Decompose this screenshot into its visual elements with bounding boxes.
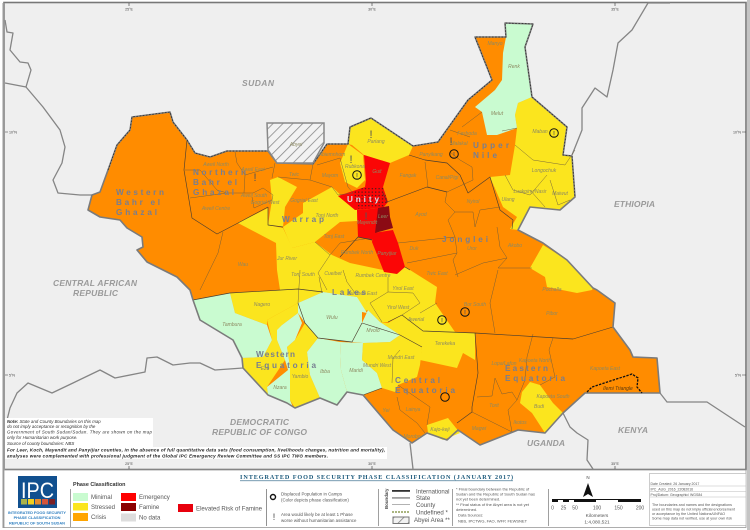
boundary footnotes: Sudan and the Republic of South Sudan has	[456, 492, 535, 496]
map information box: or acceptance by the United Nations/UNFAO	[652, 512, 725, 516]
scale bar: 100	[593, 506, 601, 512]
exclamation markers: worse without assistance: !	[449, 136, 453, 148]
country labels: REPUBLIC	[73, 288, 119, 298]
county labels: Kapoeta East	[590, 366, 621, 372]
county labels: Rumbek Centre	[355, 273, 391, 279]
IPC logo: IPC	[21, 478, 54, 503]
country labels: CENTRAL AFRICAN	[53, 278, 138, 288]
county labels: Leer	[378, 214, 388, 220]
boundary legend: State	[416, 495, 431, 502]
county labels: Fashoda	[457, 131, 477, 137]
note box: only for Humanitarian work purpose.	[7, 435, 78, 440]
legend title: INTEGRATED FOOD SECURITY PHASE CLASSIFICATION (JANUARY 2017)	[240, 474, 513, 481]
boundary legend: Boundary	[384, 488, 389, 509]
scale bar: 0	[551, 506, 554, 512]
north arrow: N	[586, 475, 590, 480]
county labels: Mundri West	[363, 363, 392, 369]
county labels: Maban	[532, 129, 548, 135]
county labels: Yirol East	[392, 286, 414, 292]
graticule labels: 30°E	[368, 462, 377, 466]
phase classification legend: No data	[139, 514, 161, 522]
famine county: Leer	[375, 206, 393, 233]
county labels: Aweil South	[240, 193, 267, 199]
map information box: Proj/Datum: Geographic/ WGS84	[650, 493, 702, 497]
county labels: Ayod	[414, 212, 427, 218]
boundary legend: Abyei Area **	[414, 517, 451, 524]
state labels: Eastern	[505, 364, 548, 373]
scale bar: 150	[614, 506, 623, 512]
county labels: Tambura	[222, 322, 242, 328]
state labels: Unity	[347, 195, 379, 204]
county labels: Ikotos	[513, 420, 527, 426]
scale bar	[551, 499, 644, 526]
state labels: Equatoria	[395, 386, 455, 395]
stressed counties	[230, 97, 593, 440]
county labels: Aweil East	[240, 167, 265, 173]
country labels	[53, 78, 655, 448]
symbol legend: Displaced Population in Camps	[281, 492, 343, 496]
state labels: Ghazal	[193, 188, 234, 197]
county labels: Tonj South	[291, 272, 315, 278]
boundary footnotes	[452, 486, 549, 526]
state labels: Bahr el	[193, 178, 237, 187]
phase classification legend: Minimal	[91, 494, 112, 501]
exclamation markers: worse without assistance: !	[453, 151, 455, 160]
state labels: Northern	[193, 168, 246, 177]
county labels: Abyei	[289, 142, 303, 148]
scale bar: Kilometers	[586, 513, 609, 519]
county labels: Rumbek North	[341, 250, 373, 256]
exclamation markers: worse without assistance: !	[553, 130, 555, 139]
county labels: Wulu	[326, 315, 338, 321]
county labels: Terekeka	[435, 341, 455, 347]
graticule labels: 25°E	[125, 462, 134, 466]
state labels: Ghazal	[116, 208, 157, 217]
boundary legend: International	[416, 488, 450, 496]
exclamation markers: worse without assistance	[253, 129, 555, 326]
phase classification legend	[70, 482, 263, 527]
exclamation markers: worse without assistance: !	[441, 317, 443, 326]
exclamation markers: worse without assistance: !	[364, 211, 368, 223]
county labels: Twic	[289, 172, 299, 178]
county labels: Kajo-keji	[430, 427, 450, 433]
phase classification legend: Stressed	[91, 504, 115, 511]
symbol legend: !	[273, 512, 275, 522]
icon: Abyei area hatch	[267, 123, 324, 163]
note box: do not imply acceptance or recognition by the	[7, 424, 96, 429]
state labels: Equatoria	[505, 374, 565, 383]
country labels: REPUBLIC OF CONGO	[212, 427, 307, 437]
county labels: Panyikang	[419, 152, 443, 158]
symbol legend	[266, 489, 357, 526]
note box: Note: State and County Boundaries on this map	[7, 419, 101, 424]
symbol legend: (Color depicts phase classification)	[281, 498, 349, 502]
boundary footnotes: * Final boundary between the Republic of	[456, 486, 530, 492]
phase classification legend: Crisis	[91, 514, 106, 521]
note box	[5, 418, 387, 459]
county labels: Duk	[410, 246, 419, 252]
county labels: Morobo	[404, 434, 421, 440]
county labels: Cueibet	[324, 271, 342, 277]
county labels: Mvolo	[366, 328, 380, 334]
country labels: DEMOCRATIC	[230, 417, 290, 427]
graticule labels: 10°N	[9, 130, 17, 134]
state labels: Western	[256, 350, 295, 359]
state labels	[116, 141, 565, 395]
county labels	[201, 41, 633, 440]
county labels: Nagero	[254, 302, 270, 308]
map information box: Some map data not verified, use at your own risk	[652, 516, 732, 520]
symbol legend: Area would likely be at least 1 Phase	[281, 512, 353, 517]
north arrow	[583, 475, 593, 497]
boundary legend	[378, 488, 451, 526]
state labels: Western	[116, 188, 164, 197]
county labels: Panyijiar	[377, 251, 397, 257]
county labels: Aweil Centre	[201, 206, 230, 212]
map information box: used on this map do not imply official endorsement	[652, 508, 735, 512]
county labels: Torit	[489, 403, 499, 409]
county labels: Malakal	[450, 141, 469, 147]
boundary footnotes: Data Sources:	[458, 512, 483, 518]
county labels: Fangak	[400, 173, 417, 179]
county labels: Ilemi Triangle	[603, 386, 633, 392]
note box: Source of county boundaries: NBS	[7, 441, 74, 446]
county labels: Budi	[534, 404, 545, 410]
county labels: Pochalla	[542, 287, 562, 293]
county boundaries	[185, 112, 575, 433]
legend panel	[4, 470, 746, 528]
county labels: Bor South	[464, 302, 486, 308]
phase classification legend: Famine	[139, 504, 160, 511]
exclamation markers: worse without assistance: !	[464, 309, 466, 318]
county labels: Yirol West	[387, 305, 410, 311]
minimal counties	[193, 23, 533, 407]
Ilemi triangle undefined boundary	[587, 374, 642, 393]
note box: analyses were complemented with professional judgment of the Global IPC Emergency Review Committee and SS IPC TWG members.	[7, 454, 328, 458]
county labels: Tonj North	[316, 213, 339, 219]
country labels: UGANDA	[527, 438, 565, 448]
displaced population camp markers	[353, 129, 558, 401]
county labels: Maiwut	[552, 191, 569, 197]
symbol legend: worse without humanitarian assistance	[281, 518, 357, 523]
international outline	[88, 23, 660, 445]
exclamation markers: worse without assistance: !	[253, 172, 257, 184]
country labels: KENYA	[618, 425, 648, 435]
map information box: IPC_AUG_2016_22082016	[650, 488, 693, 492]
map of South Sudan	[88, 23, 660, 445]
country labels: SUDAN	[242, 78, 275, 88]
state labels: Nile	[473, 151, 497, 160]
county labels: Yei	[383, 408, 390, 414]
county labels: Ibba	[320, 369, 330, 375]
county labels: Yambio	[292, 374, 309, 380]
county labels: Mayom	[322, 173, 338, 179]
north border dashes	[108, 23, 575, 197]
phase classification legend: Phase Classification	[73, 482, 125, 488]
boundary footnotes: not yet been determined.	[456, 496, 500, 502]
county labels: Mundri East	[388, 355, 415, 361]
graticule labels: 10°N	[733, 130, 741, 134]
state labels: Central	[395, 376, 440, 385]
state labels: Equatoria	[256, 361, 316, 370]
graticule labels: 5°N	[735, 374, 741, 378]
state labels: Warrap	[282, 215, 324, 224]
map information box	[650, 474, 746, 526]
note box: For Leer, Koch, Mayendit and Panyijiar counties, in the absence of full quantitative data sets (food consumption, livelihoods changes, nutrition and mortality),	[7, 448, 385, 452]
county labels: Rumbek East	[347, 291, 378, 297]
county labels: Mayendit	[357, 220, 378, 226]
map information box: The boundaries and names and the designations	[652, 503, 732, 507]
county labels: Lainya	[406, 407, 421, 413]
county labels: Ulang	[501, 197, 515, 203]
county labels: Akobo	[507, 243, 522, 249]
emergency counties	[338, 155, 405, 274]
county labels: Maridi	[349, 368, 364, 374]
boundary footnotes: NBS, IPCTWG, FAO, WFP, FEWSNET	[458, 518, 528, 524]
IPC logo	[8, 476, 66, 526]
county labels: Longochuk	[532, 168, 557, 174]
graticule labels: 30°E	[368, 8, 377, 12]
state boundaries	[184, 140, 613, 423]
county labels: Ezo	[261, 366, 270, 372]
map information box: Date Created: 26 January 2017	[650, 482, 699, 486]
county labels: Luakpiny/Nasir	[513, 189, 547, 195]
phase classification legend: Emergency	[139, 494, 171, 501]
county labels: Kapoeta North	[519, 358, 551, 364]
county labels: Manyo	[487, 41, 503, 47]
county labels: Wau	[238, 262, 248, 268]
county labels: Pibor	[546, 311, 558, 317]
elevated risk of famine stipple	[352, 187, 388, 209]
county labels: Tonj East	[324, 234, 345, 240]
boundary legend: Undefined *	[416, 510, 448, 516]
county labels: Magwi	[472, 426, 487, 432]
county labels: Renk	[508, 64, 520, 70]
county labels: Rubkona	[345, 164, 365, 170]
boundary footnotes: determined.	[456, 507, 477, 512]
IPC logo: REPUBLIC OF SOUTH SUDAN	[9, 520, 65, 526]
county labels: Gogrial East	[290, 198, 318, 204]
exclamation markers: worse without assistance: !	[369, 129, 373, 141]
county labels: Jur River	[276, 256, 297, 262]
scale bar: 25	[561, 506, 566, 512]
county labels: Canal/Pigi	[436, 175, 459, 181]
graticule labels: 5°N	[9, 374, 15, 378]
state labels: Upper	[473, 141, 510, 150]
county labels: Awerial	[407, 317, 425, 323]
county labels: Melut	[491, 111, 504, 117]
exclamation markers: worse without assistance: !	[356, 172, 358, 181]
county labels: Lopa/Lafon	[491, 361, 517, 367]
graticule labels: 35°E	[611, 8, 620, 12]
boundary legend: County	[416, 502, 436, 509]
scale bar: 1:4,080,521	[584, 520, 610, 526]
boundary footnotes: ** Final status of the Abyei area is not yet	[456, 502, 530, 507]
IPC logo: INTEGRATED FOOD SECURITY	[8, 510, 66, 515]
IPC logo: PHASE CLASSIFICATION	[14, 515, 61, 520]
country labels: ETHIOPIA	[614, 199, 655, 209]
state labels: Jonglei	[442, 235, 488, 244]
county labels: Gogrial West	[251, 200, 280, 206]
county labels: Uror	[467, 246, 477, 252]
base: crisis counties	[88, 23, 660, 445]
scale bar: 200	[636, 506, 644, 512]
county labels: Kapoeta South	[536, 394, 570, 400]
exclamation markers: worse without assistance: !	[349, 154, 353, 166]
scale bar: 50	[572, 506, 578, 512]
county labels: Nyirol	[467, 199, 480, 205]
state labels: Bahr el	[116, 198, 160, 207]
county labels: Pariang	[367, 139, 385, 145]
graticule labels: 25°E	[125, 8, 134, 12]
note box: Government of South Sudan/Sudan. They are shown on the map	[7, 430, 153, 434]
phase classification legend: Elevated Risk of Famine	[196, 506, 263, 512]
county labels: Guit	[372, 169, 382, 175]
state labels: Lakes	[332, 288, 366, 297]
county labels: Abiemnhom	[318, 152, 345, 158]
county labels: Aweil North	[202, 162, 229, 168]
county labels: Nzara	[273, 385, 287, 391]
county labels: Twic East	[426, 271, 448, 277]
graticule labels: 35°E	[611, 462, 620, 466]
